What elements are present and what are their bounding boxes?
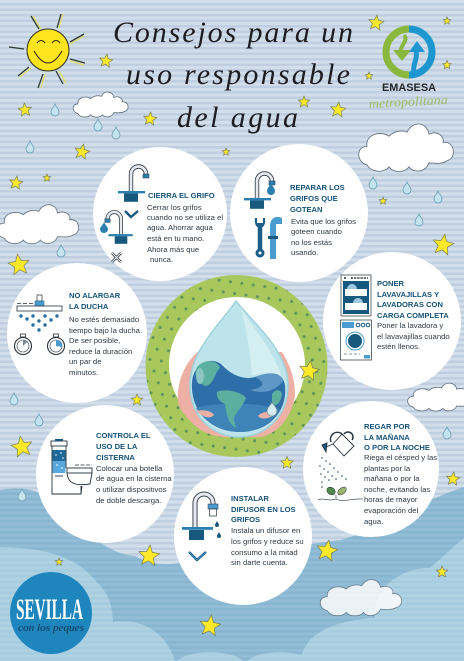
- heading: GRIFOS: [231, 515, 260, 524]
- icon: toilet with bottle: [51, 439, 92, 494]
- heading: NO ALARGAR: [69, 291, 121, 300]
- body text: los grifos y reduce su: [231, 537, 304, 546]
- body text: horas de mayor: [364, 495, 418, 504]
- body text: [291, 217, 356, 257]
- heading: REGAR POR: [364, 422, 411, 431]
- body text: minutos.: [69, 368, 98, 377]
- panel: controla la cisterna: [36, 405, 174, 543]
- heading: PONER: [377, 279, 405, 288]
- body text: de doble descarga.: [96, 496, 161, 505]
- body text: De ser posible,: [69, 336, 120, 345]
- heading: [231, 494, 296, 524]
- body text: Ahora más que: [147, 245, 199, 254]
- body text: o utilizar dispositivos: [96, 485, 167, 494]
- body text: cuando no se utiliza el: [147, 213, 223, 222]
- icon: watering can and plant: [318, 432, 363, 501]
- body text: goteen cuando: [291, 227, 342, 236]
- heading: REPARAR LOS: [290, 183, 345, 192]
- logo: Sevilla con los peques: [10, 572, 92, 654]
- logo: EMASESA metropolitana: [368, 29, 449, 111]
- heading: CONTROLA EL: [96, 431, 151, 440]
- body text: tiempo bajo la ducha.: [69, 326, 142, 335]
- body text: sin darte cuenta.: [231, 558, 288, 567]
- body text: está en tu mano.: [147, 234, 204, 243]
- logo: Sevilla con los peques: SEVILLA: [16, 593, 83, 626]
- icon: washing machine: [340, 320, 372, 360]
- panel: no alargar la ducha: [7, 263, 147, 403]
- body text: Riega el césped y las: [364, 453, 437, 462]
- heading: INSTALAR: [231, 494, 269, 503]
- heading: GRIFOS QUE: [290, 194, 338, 203]
- body text: [231, 526, 304, 567]
- body text: [364, 453, 437, 526]
- body text: mañana o por la: [364, 474, 420, 483]
- body text: no los estás: [291, 238, 332, 247]
- heading: CIERRA EL GRIFO: [148, 191, 215, 200]
- body text: el lavavajillas cuando: [377, 332, 450, 341]
- icon: wrenches: [255, 217, 282, 259]
- title: Consejos para un: [113, 16, 353, 49]
- icon: faucet with diffuser: [182, 494, 221, 560]
- icon: closed faucet with drop: [100, 211, 138, 262]
- heading: GOTEAN: [290, 205, 322, 214]
- body text: No estés demasiado: [69, 315, 139, 324]
- body text: evaporación del: [364, 506, 419, 515]
- heading: USO DE LA: [96, 442, 138, 451]
- panel: reparar los grifos: [230, 144, 368, 282]
- logo: Sevilla con los peques: con los peques: [18, 622, 84, 634]
- heading: O POR LA NOCHE: [364, 443, 430, 452]
- icon: dripping faucet: [244, 174, 275, 209]
- body text: [147, 203, 223, 264]
- panel: cierra el grifo: [93, 147, 227, 281]
- body text: noche, evitando las: [364, 485, 430, 494]
- logo: EMASESA metropolitana: metropolitana: [368, 92, 449, 111]
- body text: [96, 464, 172, 505]
- central emblem: drop, globe and hands: [146, 275, 328, 457]
- heading: LA MAÑANA: [364, 433, 410, 442]
- water drops: [10, 104, 451, 501]
- title: [113, 16, 353, 134]
- body text: Poner la lavadora y: [377, 321, 443, 330]
- body text: Colocar una botella: [96, 464, 163, 473]
- icon: stopwatches: [14, 334, 64, 354]
- icon: dishwasher: [341, 275, 371, 316]
- body text: un par de: [69, 357, 101, 366]
- heading: LA DUCHA: [69, 302, 109, 311]
- heading: [96, 431, 151, 462]
- body text: reduce la duración: [69, 347, 132, 356]
- body text: estén llenos.: [377, 342, 420, 351]
- panel: poner lavavajillas y lavadoras: [323, 252, 461, 390]
- body text: [69, 315, 142, 377]
- heading: [290, 183, 345, 214]
- heading: [364, 422, 430, 452]
- body text: plantas por la: [364, 464, 411, 473]
- bottom waves: [0, 487, 464, 661]
- star over emblem: [298, 359, 321, 381]
- body text: [377, 321, 450, 351]
- body text: usando.: [291, 248, 318, 257]
- body text: agua.: [364, 517, 383, 526]
- panel: instalar difusor: [174, 467, 312, 605]
- body text: nunca.: [150, 255, 173, 264]
- title: uso responsable: [126, 58, 350, 91]
- title: del agua: [177, 101, 298, 134]
- heading: DIFUSOR EN LOS: [231, 505, 296, 514]
- body text: Evita que los grifos: [291, 217, 356, 226]
- body text: de agua en la cisterna: [96, 474, 172, 483]
- panel: regar por la mañana: [303, 401, 439, 537]
- clouds: [0, 92, 464, 616]
- body text: Cerrar los grifos: [147, 203, 202, 212]
- body text: agua. Ahorrar agua: [147, 223, 214, 232]
- heading: CARGA COMPLETA: [377, 311, 449, 320]
- heading: LAVADORAS CON: [377, 300, 443, 309]
- heading: CISTERNA: [96, 453, 135, 462]
- heading: LAVAVAJILLAS Y: [377, 290, 439, 299]
- icon: shower: [17, 295, 62, 332]
- heading: [377, 279, 449, 320]
- icon: smiling sun: [9, 14, 85, 88]
- body text: Instala un difusor en: [231, 526, 300, 535]
- body text: consumo a la mitad: [231, 548, 298, 557]
- logo: EMASESA metropolitana: EMASESA: [382, 82, 436, 94]
- heading: [69, 291, 121, 311]
- icon: open faucet: [118, 166, 149, 202]
